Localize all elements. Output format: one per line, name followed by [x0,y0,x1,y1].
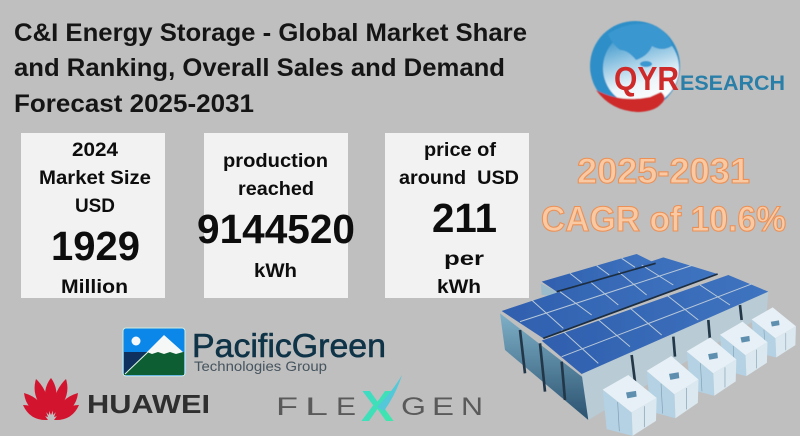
panel: market size [21,133,165,298]
logo: FlexGen: E [336,393,356,421]
panel: production [197,133,355,298]
panel: production: reached [238,179,314,200]
panel: market size: USD [75,196,115,217]
logo: FlexGen: X [361,382,394,431]
logo: Pacific Green [123,327,386,376]
panel grid lines [520,258,753,363]
cabinet 3 [687,337,736,396]
cabinet 2 [647,356,698,418]
cabinet 1 [603,375,657,436]
logo: FlexGen: E [432,393,454,421]
panel: price: kWh [437,277,481,298]
logo: FlexGen: F [276,393,298,421]
solar row middle [502,257,718,338]
logo: QYResearch [590,21,785,112]
title: C&I Energy Storage - Global Market Share [14,19,527,47]
panel: market size: Market Size [39,168,151,189]
logo: FlexGen [276,375,483,431]
CAGR callout: 2025-2031 [577,152,750,191]
logo: Pacific Green: Technologies Group [194,358,327,374]
logo: FlexGen: L [305,393,328,421]
panel: market size: 1929 [51,223,140,269]
title: and Ranking, Overall Sales and Demand [14,54,505,82]
panel: production: production [223,151,328,172]
panel: price: 211 [432,195,497,241]
CAGR callout: CAGR of 10.6% [541,200,786,239]
solar row back [542,254,656,292]
side walls [500,313,588,420]
panel: price: price of [424,140,497,161]
panel: price: per [444,249,485,270]
logo: QYResearch: ESEARCH [680,72,785,95]
front wall [582,292,768,420]
panel: price: around USD [399,168,519,189]
logo: Huawei: HUAWEI [87,389,210,419]
panel: price [385,133,529,298]
CAGR callout [541,152,786,239]
title: Forecast 2025-2031 [14,90,254,118]
logo: FlexGen: N [461,393,483,421]
title [14,19,527,118]
solar row front [542,275,768,374]
logo: Huawei [23,378,210,420]
illustration: battery storage with solar roofs [500,254,796,436]
logo: Pacific Green: PacificGreen [192,327,386,364]
panel: market size: 2024 [72,140,118,161]
panel: market size: Million [61,277,128,298]
logo: QYResearch: QYR [614,60,679,97]
logo: FlexGen: G [401,393,426,421]
cabinet 4 [720,322,767,376]
cabinet 5 [752,307,796,357]
panel: production: 9144520 [197,206,355,252]
panel: production: kWh [254,261,297,282]
